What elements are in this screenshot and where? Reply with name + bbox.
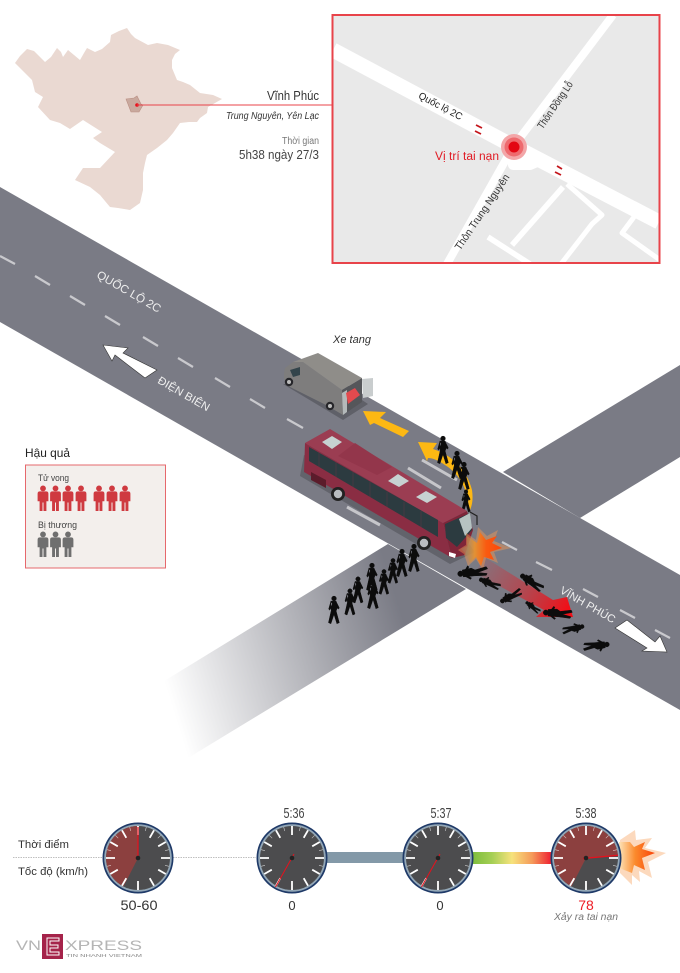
van windshield [290, 367, 300, 377]
bus side [304, 443, 452, 558]
bus windshield [445, 513, 472, 547]
center dashes [0, 256, 670, 638]
label: Xe tang: Xe tang [332, 334, 372, 346]
label: Thời điểm: Thời điểm [18, 839, 69, 851]
hearse van [283, 353, 373, 420]
road label: Thôn Trung Nguyên [453, 172, 512, 253]
yellow arrow curved [418, 442, 473, 512]
value: 0 [436, 898, 444, 913]
label: Quốc lộ 2C: QUỐC LỘ 2C [94, 267, 164, 316]
gauge: 5:38 [550, 822, 622, 894]
caption: Xảy ra tai nạn [553, 911, 618, 923]
accident label: Vị trí tai nạn [435, 151, 499, 163]
bus shadow [300, 455, 475, 564]
injured icons [38, 532, 73, 557]
van side [284, 362, 343, 415]
arrow: to Điện Biên [103, 345, 157, 378]
location text [226, 89, 319, 162]
timeline labels [13, 856, 256, 858]
time label: 5:37 [430, 805, 452, 822]
label: Tốc độ: Tốc độ (km/h) [18, 866, 88, 878]
roof hatches [322, 436, 437, 503]
gauge: 5:36 [256, 822, 328, 894]
walking group beside bus [438, 436, 470, 512]
coffin [346, 388, 360, 404]
road: left arm fading [120, 544, 466, 772]
explosion at impact [458, 527, 511, 570]
van door [362, 378, 373, 398]
bus roof [305, 429, 467, 523]
logo: VnExpress [16, 934, 142, 959]
road label: Thôn Đồng Lỗ [534, 79, 576, 131]
value: 50-60 [120, 898, 158, 913]
arrow: to Vĩnh Phúc [615, 620, 667, 652]
gauge: 50-60 [102, 822, 174, 894]
time label: 5:38 [576, 805, 596, 822]
logo: VnExpress: XPRESS [65, 937, 142, 953]
gauge: 5:37 [402, 822, 474, 894]
logo: VnExpress: TIN NHANH VIETNAM [66, 953, 142, 958]
bus front [443, 511, 473, 558]
value: 78: 78 [578, 897, 594, 913]
location text: Thời gian [282, 136, 319, 147]
value: 0 [288, 898, 296, 913]
heading: Hậu quả: Hậu quả [25, 446, 70, 460]
location text: 5h38 ngày 27/3 [239, 148, 319, 162]
bus [300, 429, 477, 564]
van roof [293, 353, 362, 390]
road: Quốc lộ 2C [0, 187, 680, 710]
victims lying [457, 563, 610, 654]
standing crowd [329, 544, 419, 624]
panel: casualties [26, 465, 166, 568]
accident marker [501, 134, 527, 160]
road: right arm [503, 365, 680, 518]
panel: locator map [332, 15, 660, 264]
van shadow [283, 384, 368, 420]
dead icons [38, 486, 130, 511]
road label: Quốc lộ 2C [416, 90, 464, 123]
map of northern Vietnam [15, 28, 222, 210]
province marker [126, 96, 143, 112]
bar: stopped [327, 852, 404, 863]
location text: Vĩnh Phúc [267, 89, 319, 103]
van rear interior [342, 378, 362, 415]
panel: casualties: Tử vong [38, 473, 69, 483]
label: Điện Biên: ĐIỆN BIÊN [155, 374, 212, 414]
location text: Trung Nguyên, Yên Lạc [226, 111, 319, 122]
bar: acceleration [472, 852, 552, 864]
time label: 5:36 [284, 805, 304, 822]
direction ticks [475, 125, 562, 175]
rear grille [311, 472, 326, 488]
red impact arrow [475, 557, 573, 617]
connector line [137, 104, 332, 106]
explosion at gauge [619, 830, 666, 885]
bus windows [309, 447, 438, 537]
yellow arrow straight [363, 411, 409, 437]
label: Vĩnh Phúc: VĨNH PHÚC [558, 584, 618, 626]
logo: VnExpress: VN [16, 937, 41, 953]
panel: casualties: Bị thương [38, 520, 77, 530]
